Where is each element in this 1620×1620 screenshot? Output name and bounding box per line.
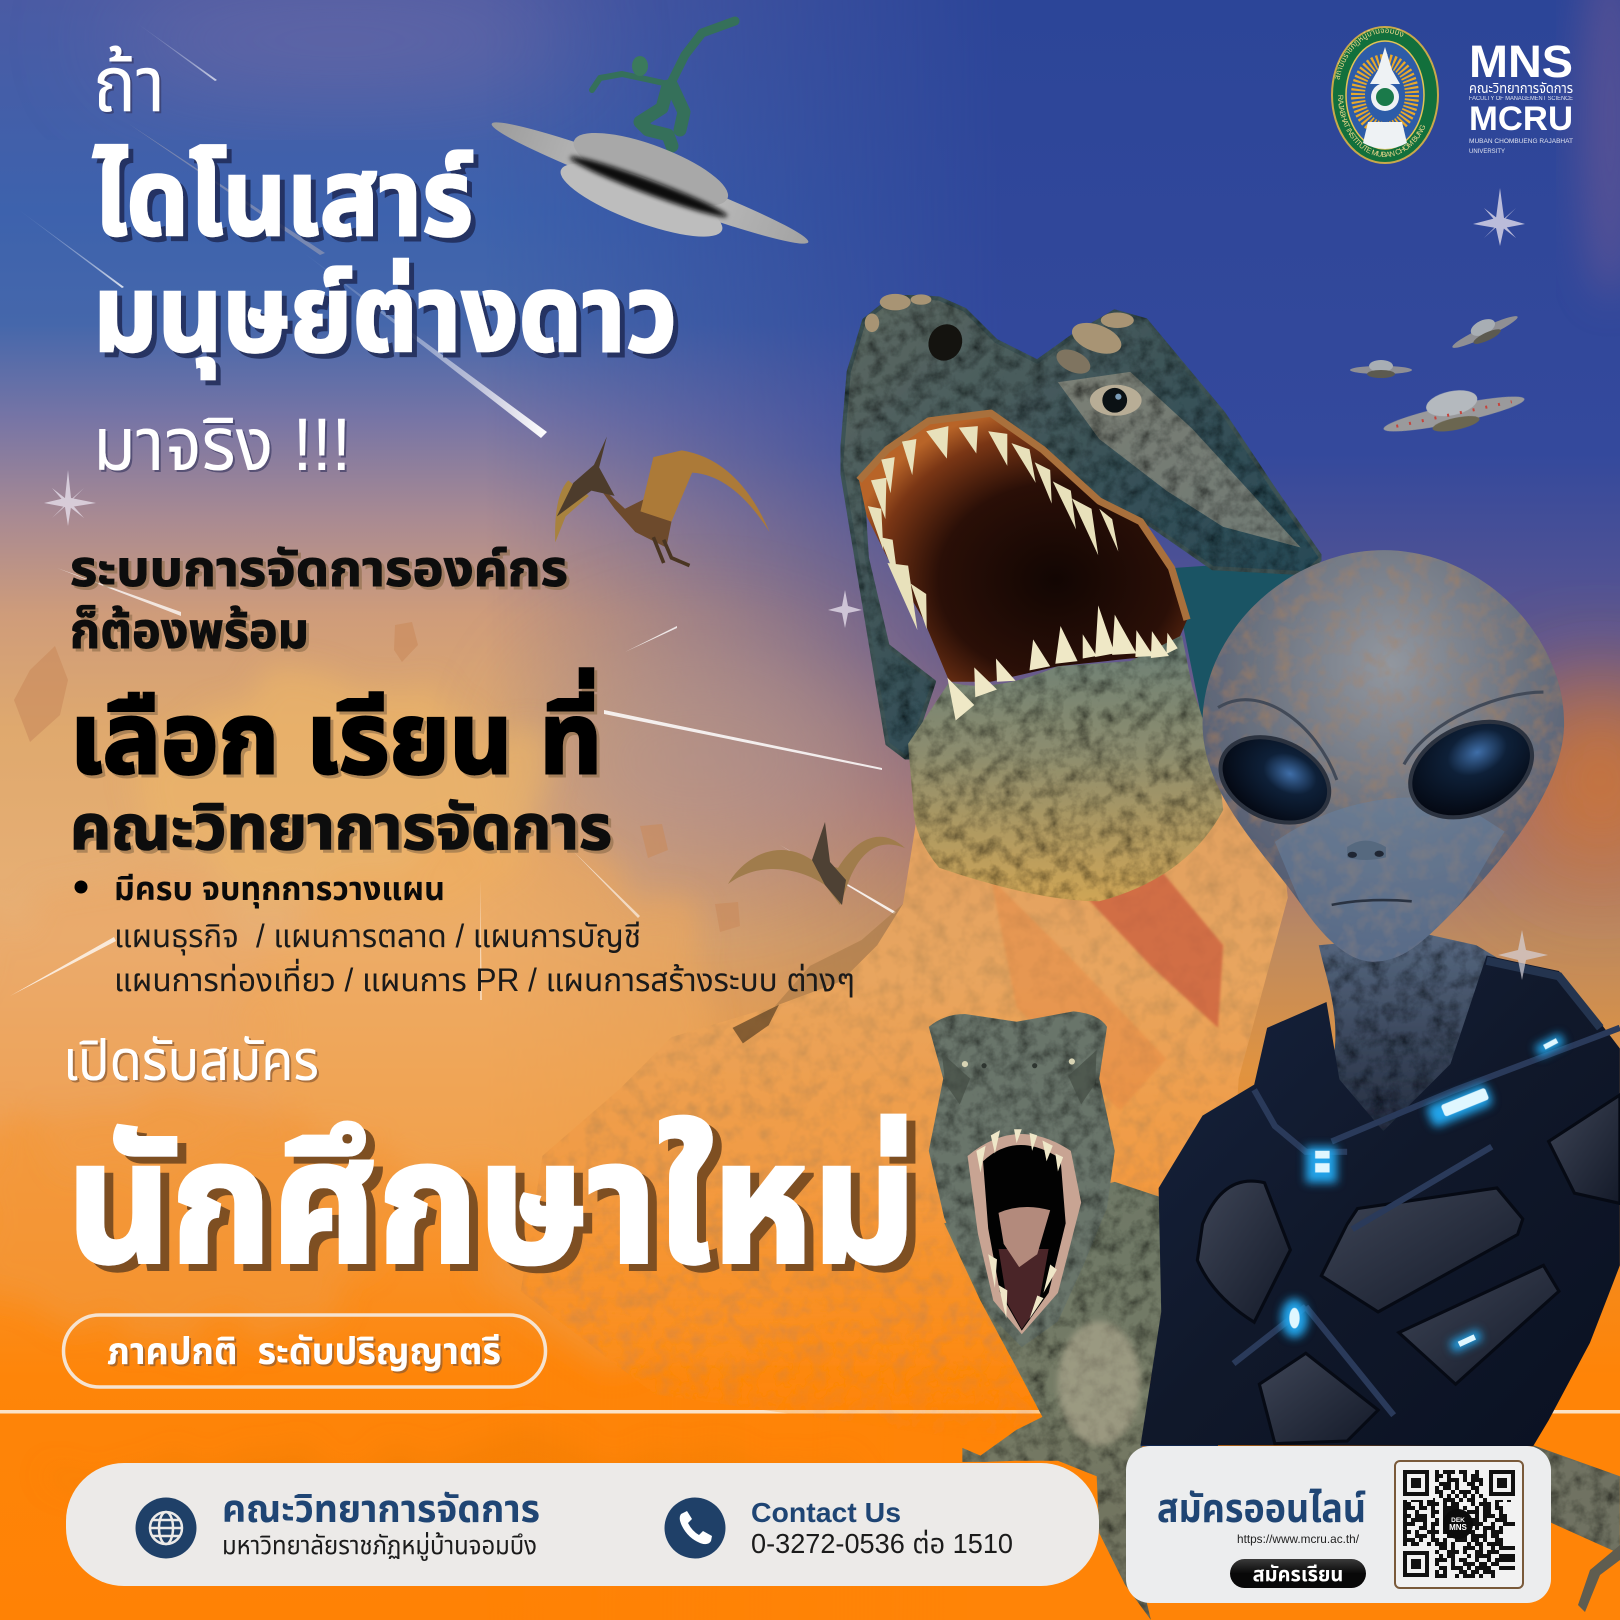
pterosaur two [728,822,905,905]
icon: globe [136,1498,196,1558]
logo: MNS MCRU wordmark: MNS [1469,36,1573,87]
upper teeth [868,426,1118,630]
subheading line 2: ก็ต้องพร้อม [70,603,309,659]
subheading line 1: ระบบการจัดการองค์กร [70,541,568,597]
contact text: 0-3272-0536 ต่อ 1510 [751,1528,1013,1559]
lower jaw [908,635,1223,901]
saucer [477,89,821,281]
apply button: สมัครเรียน [1253,1564,1343,1586]
alien face shading [1275,797,1505,962]
rocks [14,622,740,932]
lower teeth [947,605,1178,721]
dinosaur tail bottom right [1578,1545,1620,1612]
rex tongue [999,1207,1050,1267]
alien cape [1141,1291,1218,1446]
new students big heading: นักศึกษาใหม่ [67,1107,916,1299]
brow bumps [865,294,1134,379]
alien brow ridges [1218,692,1543,780]
dinosaur neck and body [521,775,1288,1446]
faculty contact text [222,1489,540,1561]
contact text [751,1497,1013,1559]
small UFO 1 [1350,360,1412,378]
dinosaur upper skull [841,295,1321,759]
logo: MNS MCRU wordmark: คณะวิทยาการจัดการ [1469,80,1573,96]
choose study at: เลือก เรียน ที่ [70,669,602,795]
small UFO 2 [1447,306,1521,355]
logo: university crest: RAJABHAT INSTITUTE MUBAN CHOM BUNG [1338,95,1425,158]
rex tail [1533,1445,1620,1554]
faculty contact text: คณะวิทยาการจัดการ [222,1489,540,1531]
faculty name: คณะวิทยาการจัดการ [70,794,612,863]
icon: telephone [664,1498,726,1558]
bullet heading: มีครบ จบทุกการวางแผน [114,870,445,909]
footer contact bar [66,1463,1099,1586]
rex belly [1058,1321,1141,1445]
explosion clouds [0,690,890,1506]
logo: MNS MCRU wordmark: UNIVERSITY [1469,148,1506,155]
rex nostrils [981,1063,1037,1068]
pill: regular programme bachelor degree: ภาคปกติ ระดับปริญญาตรี [107,1331,501,1372]
logo: MNS MCRU wordmark: FACULTY OF MANAGEMENT SCIENCE [1469,96,1573,102]
armour straps [1234,961,1620,1415]
headline block: organisation systems [70,541,855,998]
alien head [1203,550,1564,962]
contact text: Contact Us [751,1497,901,1528]
plan list line 1: แผนธุรกิจ / แผนการตลาด / แผนการบัญชี [114,918,641,955]
mouth interior [859,413,1187,682]
faculty contact text: มหาวิทยาลัยราชภัฏหมู่บ้านจอมบึง [222,1530,537,1561]
alien eyes [1207,703,1548,839]
QR code [1395,1461,1523,1588]
title line 3: มนุษย์ต่างดาว [93,253,677,379]
sparkle on alien shoulder [1498,930,1548,980]
logo: MNS MCRU wordmark [1469,36,1573,155]
logo: university crest: สถาบันราชภัฏหมู่บ้านจอมบึง [1335,28,1404,80]
bullet [74,880,88,894]
large dinosaur [521,294,1321,1446]
logo: MNS MCRU wordmark: MUBAN CHOMBUENG RAJABHAT [1469,138,1573,145]
small T-rex [929,1011,1620,1620]
alien [1141,550,1620,1446]
title: if dinosaurs aliens really come [93,40,677,486]
plan list line 2: แผนการท่องเที่ยว / แผนการ PR / แผนการสร้างระบบ ต่างๆ [114,958,855,998]
rex eyes [962,1058,1075,1067]
rex brow shading [942,1050,1097,1104]
glowing lights [1281,1033,1565,1353]
small UFO 3 [1379,377,1528,445]
logo: MNS MCRU wordmark: MCRU [1469,100,1573,138]
apply button [1230,1559,1366,1588]
meteor streaks [10,21,896,1000]
divider line [0,1410,1620,1414]
card url: https://www.mcru.ac.th/ [1237,1532,1360,1546]
dinosaur rear head and teal neck [1172,558,1321,775]
online application card [1126,1446,1551,1603]
upper lip ridge [859,413,1187,620]
title line 2: ไดโนเสาร์ [93,137,473,258]
card heading: สมัครออนไลน์ [1157,1487,1366,1531]
sparkles [44,188,1525,628]
rex head [929,1011,1115,1347]
eye patch on skull [1058,372,1301,547]
rex mouth [968,1134,1081,1334]
QR code: DEK [1451,1517,1465,1524]
recruit small heading: เปิดรับสมัคร [63,1029,319,1092]
rex teeth [976,1129,1063,1319]
title line 1: ถ้า [93,40,165,128]
rex body [944,1182,1177,1620]
logo: university crest [1331,26,1439,164]
title line 4: มาจริง !!! [93,403,351,486]
big UFO with surfer figure [477,21,821,281]
alien neck [1319,935,1508,1152]
QR code: MNS [1449,1523,1468,1532]
alien armour body [1141,956,1620,1446]
green surfer figure [592,21,735,146]
dinosaur eye [1090,385,1142,416]
armour plates [1197,1095,1620,1444]
alien nose and mouth [1332,841,1412,905]
pterosaur one [555,436,770,566]
pill: regular programme bachelor degree [64,1315,546,1387]
small UFO fleet [1350,306,1528,445]
nostril [922,319,968,366]
